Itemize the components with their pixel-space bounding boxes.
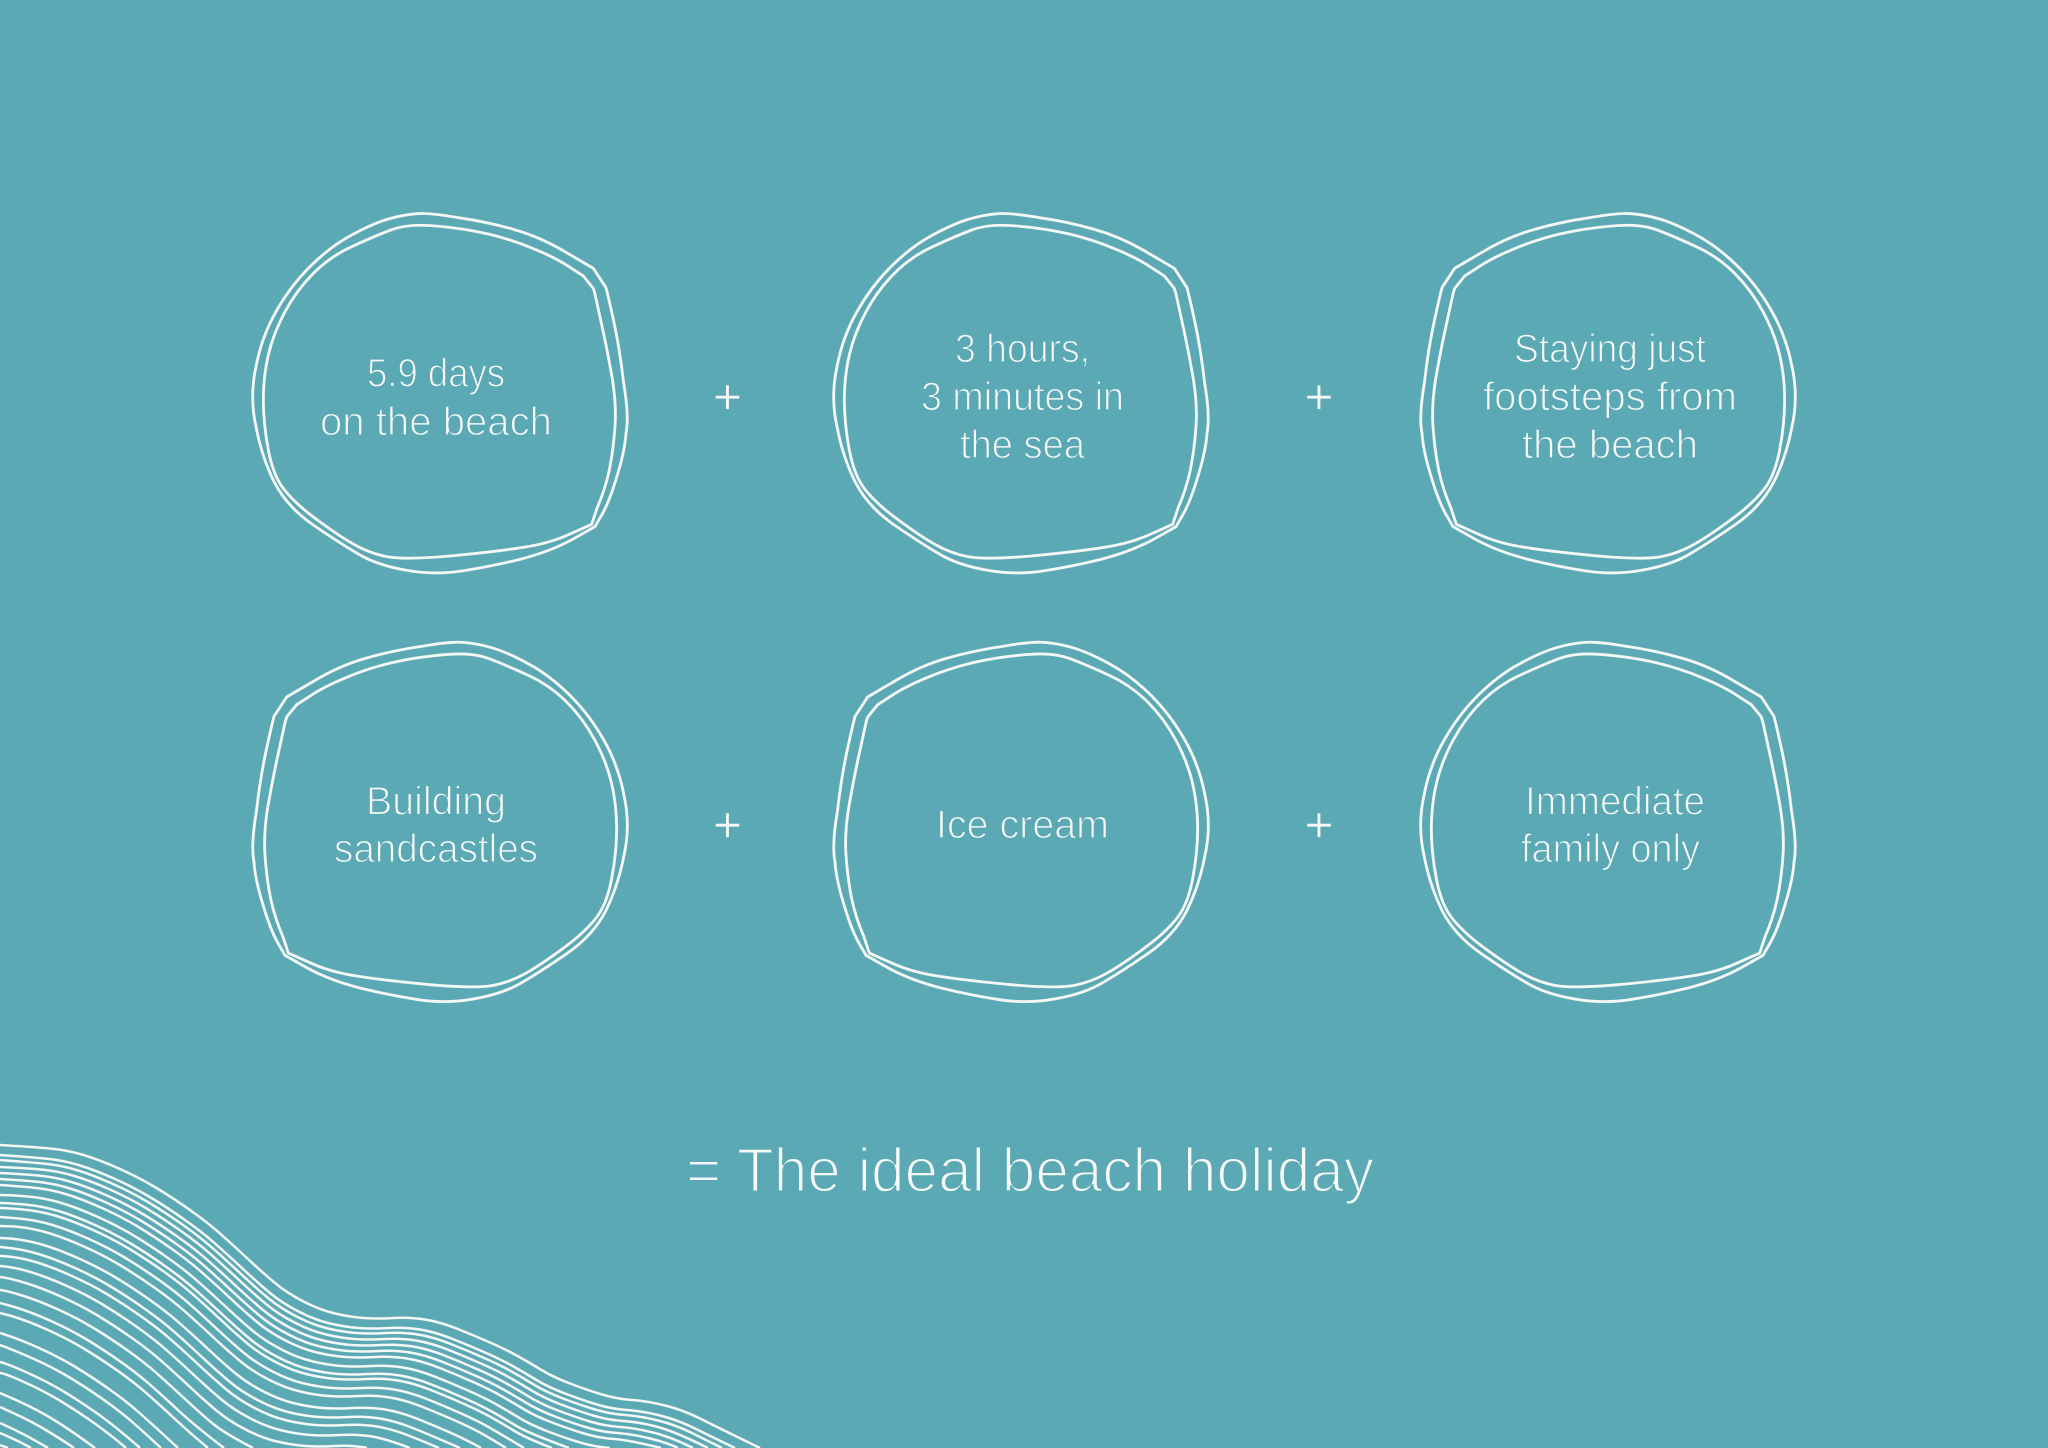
- label: sandcastles: [334, 827, 538, 871]
- label: [334, 780, 538, 871]
- label: Ice cream: [936, 803, 1109, 847]
- plus sign row 2 left: +: [713, 797, 742, 853]
- plus sign row 2 right: +: [1304, 797, 1334, 853]
- label: 3 minutes in: [921, 375, 1124, 419]
- ring outline: [253, 642, 627, 1002]
- result headline: = The ideal beach holiday: [686, 1136, 1374, 1206]
- panel: 5.9 days on the beach: [253, 213, 627, 573]
- ring outline: [834, 213, 1208, 573]
- label: 3 hours,: [955, 327, 1090, 371]
- label: on the beach: [320, 400, 552, 444]
- plus sign row 1 right: +: [1304, 369, 1334, 425]
- label: Staying just: [1514, 327, 1706, 371]
- panel: ice cream: [834, 642, 1208, 1002]
- ring outline: [1421, 213, 1795, 573]
- label: the beach: [1522, 423, 1698, 467]
- label: [921, 327, 1124, 467]
- label: [320, 352, 552, 444]
- panel: building sandcastles: [253, 642, 627, 1002]
- panel: 3 hours, 3 minutes in the sea: [834, 213, 1208, 573]
- label: [1483, 327, 1737, 467]
- panel: immediate family only: [1421, 642, 1795, 1002]
- label: family only: [1521, 827, 1700, 871]
- label: 5.9 days: [367, 352, 505, 396]
- label: footsteps from: [1483, 375, 1737, 419]
- ring outline: [1421, 642, 1795, 1002]
- label: Immediate: [1525, 780, 1705, 824]
- label: the sea: [960, 423, 1086, 467]
- ring outline: [834, 642, 1208, 1002]
- ring outline: [253, 213, 627, 573]
- label: [1521, 780, 1705, 871]
- wave contour lines: [0, 1145, 760, 1448]
- label: Building: [366, 780, 506, 824]
- panel: staying just footsteps from the beach: [1421, 213, 1795, 573]
- plus sign row 1 left: +: [713, 369, 742, 425]
